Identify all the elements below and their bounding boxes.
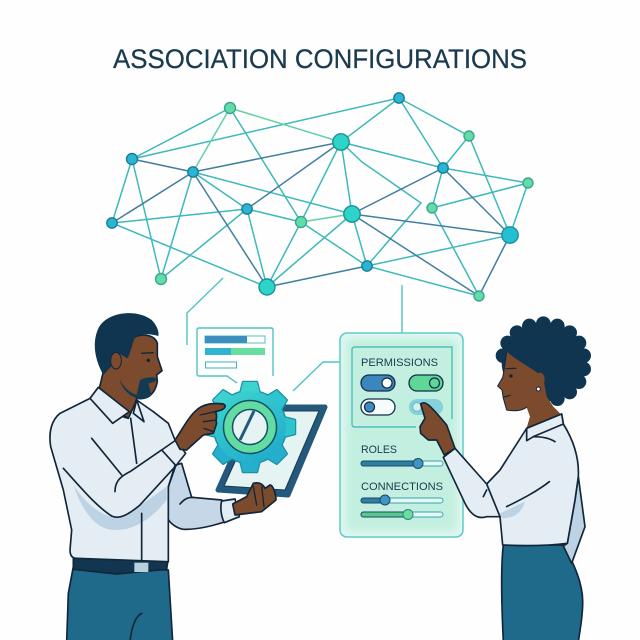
control panel: [340, 333, 463, 537]
woman eye: [503, 368, 516, 397]
connector lines: [187, 278, 402, 391]
slider: connections 1: [361, 495, 443, 505]
network nodes: [107, 93, 533, 301]
man hair: [95, 313, 159, 375]
tablet: [218, 407, 325, 495]
slider: roles: [361, 458, 443, 468]
network diagram: [107, 93, 533, 301]
man eye: [142, 353, 153, 362]
woman face and neck: [498, 352, 562, 433]
toggle: blue on: [361, 375, 395, 391]
woman hair: [496, 316, 591, 406]
man neck and face: [99, 335, 162, 418]
toggle: being pressed: [409, 399, 443, 415]
slider: connections 2: [361, 510, 443, 520]
person: woman: [420, 316, 591, 640]
speech bubble with bars: [197, 328, 273, 383]
woman back shirt panel: [563, 477, 585, 563]
title: ASSOCIATION CONFIGURATIONS: [113, 44, 527, 74]
man hands: [175, 404, 276, 515]
gear: [205, 382, 295, 472]
man back arm: [168, 463, 239, 529]
man beard: [119, 377, 157, 399]
label: permissions: PERMISSIONS: [361, 357, 438, 369]
label: roles: ROLES: [361, 444, 397, 456]
label: connections: CONNECTIONS: [361, 481, 443, 493]
toggle: white off: [361, 399, 395, 415]
man ear: [111, 352, 121, 369]
man belt: [73, 557, 168, 574]
woman ear and earring: [535, 373, 545, 391]
woman shirt: [443, 414, 578, 546]
woman skirt: [502, 545, 583, 640]
toggle: green on: [409, 375, 443, 391]
man trousers: [67, 567, 173, 640]
woman pointing hand: [420, 403, 455, 455]
permissions group box: [352, 347, 416, 427]
man shirt: [50, 387, 186, 562]
person: man: [50, 313, 239, 640]
network edges: [112, 98, 528, 296]
